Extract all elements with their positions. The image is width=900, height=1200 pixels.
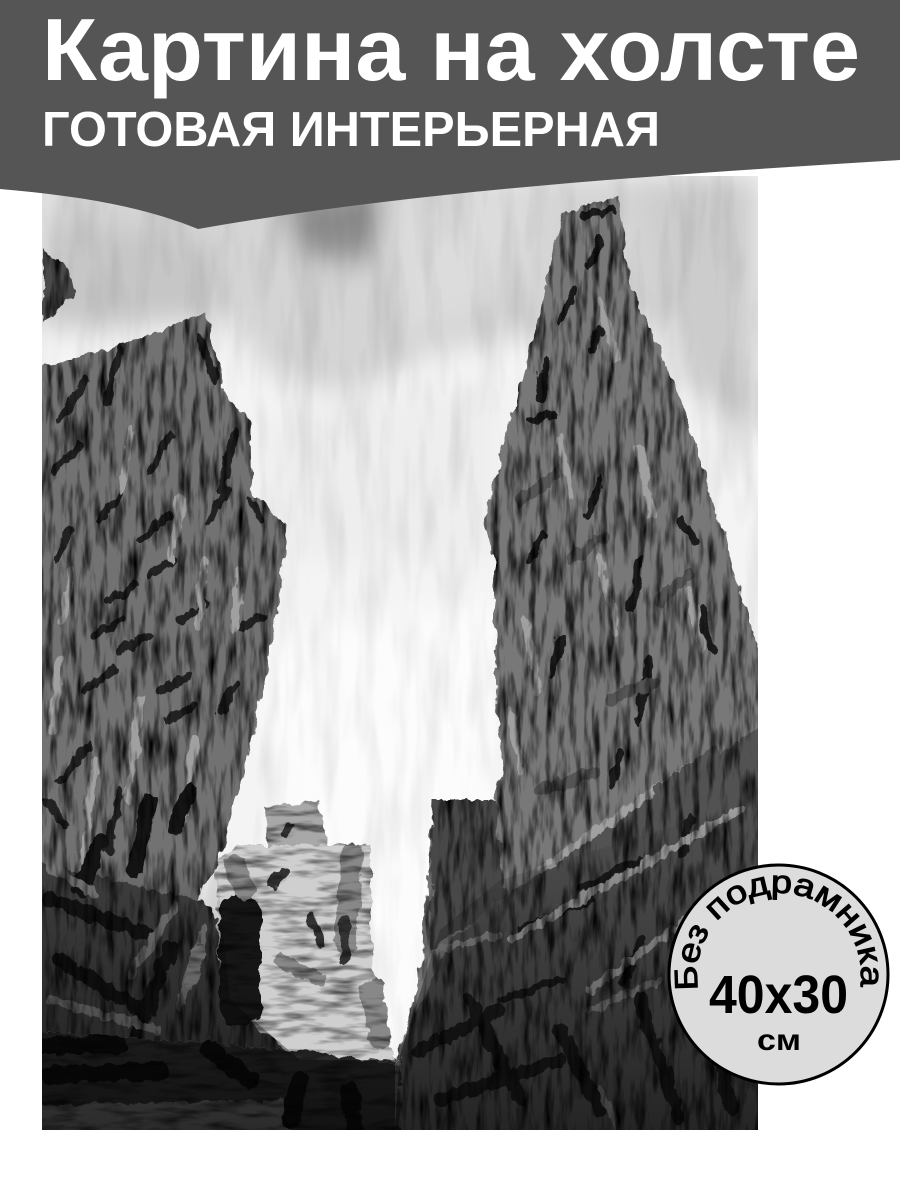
right building <box>390 196 770 1140</box>
curved label: Без подрамника <box>674 875 879 988</box>
central low buildings <box>190 800 395 1060</box>
header banner <box>0 0 900 229</box>
banner shape <box>0 0 900 229</box>
painting: skyscrapers <box>30 176 770 1140</box>
title: Картина на холсте <box>42 0 860 99</box>
unit: см <box>757 1024 801 1057</box>
right building strokes <box>420 210 750 1130</box>
left building strokes <box>45 340 262 1050</box>
dark tower <box>219 915 261 1005</box>
lower shading <box>42 800 758 1130</box>
badge circle <box>669 865 888 1084</box>
sky <box>42 176 758 1130</box>
left building <box>30 250 400 1140</box>
street level <box>42 1031 403 1130</box>
subtitle: ГОТОВАЯ ИНТЕРЬЕРНАЯ <box>42 103 660 157</box>
badge: size and no stretcher <box>668 864 890 1086</box>
size: 40x30 <box>709 965 848 1025</box>
